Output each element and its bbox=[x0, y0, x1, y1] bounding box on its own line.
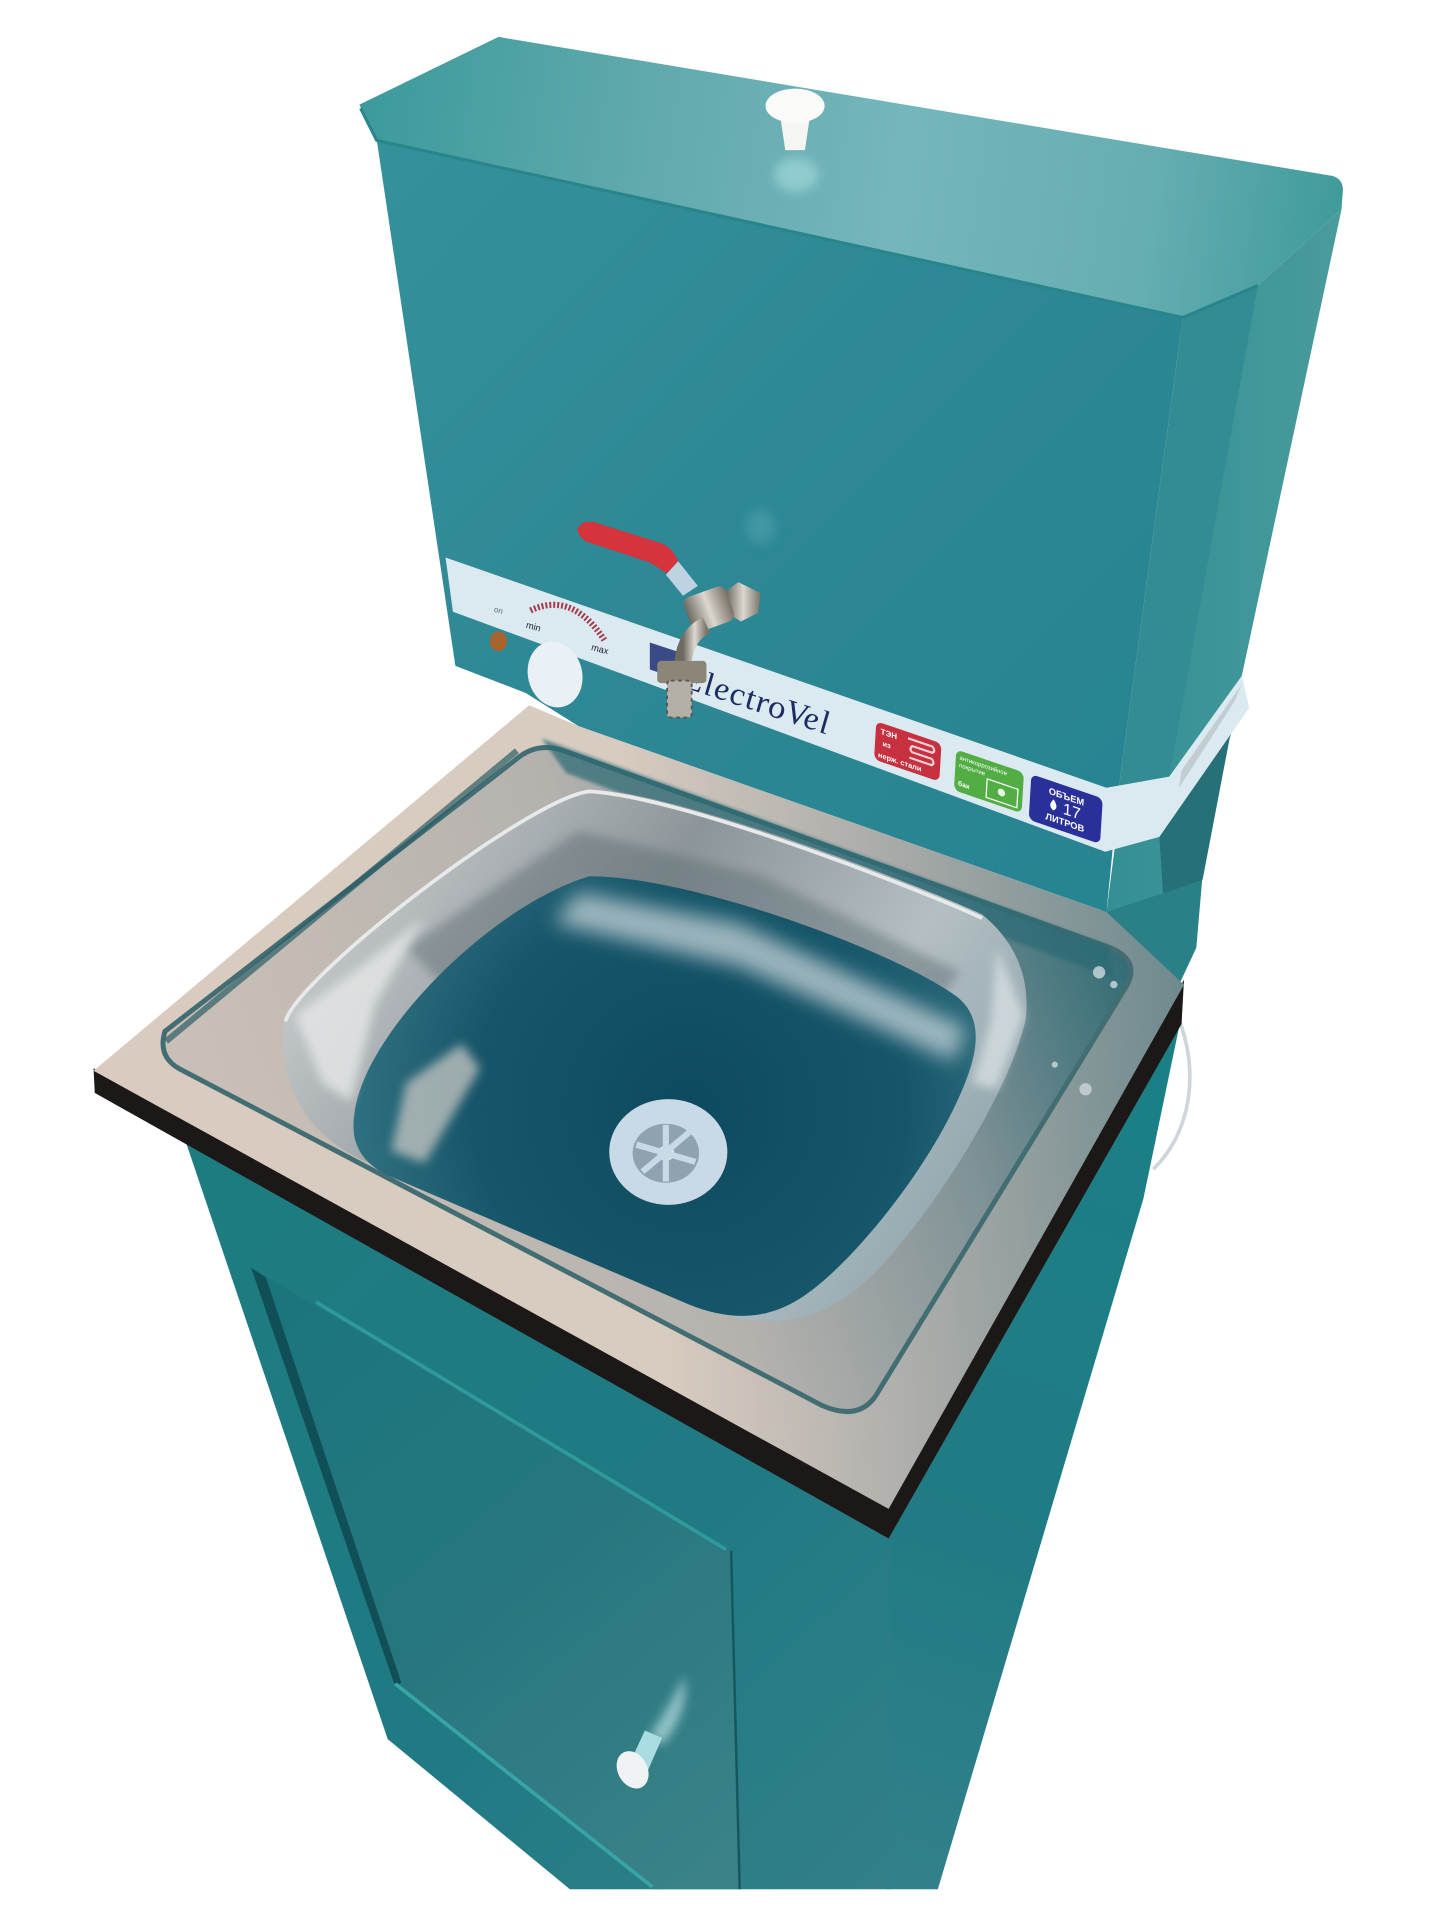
faucet inlet bbox=[726, 582, 761, 622]
tank lower side shade bbox=[1159, 713, 1238, 894]
hose barb bbox=[667, 681, 692, 718]
basin rim highlight bbox=[286, 791, 982, 1022]
door bottom highlight bbox=[395, 1684, 652, 1887]
sink top plate bbox=[94, 705, 1184, 1538]
lid reflection bbox=[774, 158, 818, 192]
band label: max: max bbox=[590, 642, 610, 656]
faucet bbox=[577, 522, 761, 718]
basin walls bbox=[283, 789, 1027, 1321]
indicator lamp bbox=[490, 631, 507, 651]
cabinet door bbox=[251, 1268, 740, 1889]
thermostat knob bbox=[521, 636, 589, 713]
basin floor bbox=[353, 876, 976, 1316]
brand name: ElectroVel bbox=[680, 658, 832, 743]
basin back wall shade bbox=[406, 831, 960, 1003]
water tank bbox=[359, 37, 1343, 912]
band label: on: on bbox=[493, 605, 504, 616]
basin left warm reflection bbox=[391, 1044, 480, 1163]
green badge: coating: покрытие bbox=[959, 762, 986, 778]
red badge: heater bbox=[874, 721, 942, 782]
red badge: heater: ТЭН bbox=[880, 727, 897, 741]
red badge: heater: нерж. стали bbox=[878, 750, 922, 774]
back flange reflection bbox=[542, 738, 1114, 978]
faucet spout bbox=[683, 625, 706, 662]
door top highlight bbox=[316, 1302, 726, 1550]
brand logo mark bbox=[650, 642, 679, 679]
plate black edge bbox=[94, 980, 1184, 1538]
plate rim channel bbox=[163, 747, 1131, 1412]
blue badge: volume: ОБЪЕМ bbox=[1048, 786, 1084, 809]
faucet lever bbox=[666, 561, 698, 596]
cabinet side panel bbox=[884, 1015, 1182, 1889]
lid front edge bbox=[361, 108, 1258, 318]
red badge: heater: из bbox=[882, 739, 891, 751]
cabinet front panel bbox=[185, 1138, 891, 1889]
faucet handle bbox=[577, 522, 678, 574]
basin left glare bbox=[295, 917, 425, 1102]
door knob bbox=[610, 1676, 685, 1794]
left flange reflection bbox=[166, 751, 517, 1041]
tank chamfer bbox=[1119, 286, 1258, 788]
tank lid bbox=[359, 37, 1343, 318]
drain bbox=[609, 1099, 727, 1205]
label band bbox=[446, 558, 1249, 852]
green badge: coating: бак bbox=[958, 779, 970, 791]
band dial scale bbox=[530, 605, 604, 640]
basin right glare bbox=[972, 948, 1024, 1089]
faucet nut bbox=[657, 661, 706, 683]
green badge: coating: антикоррозийное bbox=[959, 755, 1008, 778]
green badge: coating bbox=[954, 750, 1024, 813]
plate surface bbox=[94, 705, 1184, 1509]
blue badge: volume: ЛИТРОВ bbox=[1045, 811, 1085, 835]
door left gap bbox=[251, 1268, 401, 1686]
cabinet base bbox=[185, 1015, 1182, 1889]
tank front bbox=[377, 139, 1183, 912]
blue badge: volume: 17 bbox=[1062, 800, 1081, 824]
faucet valve body bbox=[682, 584, 736, 634]
basin floor highlight bbox=[554, 892, 966, 1061]
door right edge bbox=[731, 1551, 740, 1889]
blue badge: volume bbox=[1029, 774, 1103, 844]
water drops bbox=[1052, 966, 1118, 1095]
lid cap bbox=[766, 89, 825, 150]
backsplash behind tank bbox=[1102, 876, 1202, 985]
band label: min: min bbox=[525, 620, 542, 633]
tank soft spot bbox=[746, 510, 775, 544]
side label fine print bbox=[1179, 684, 1242, 788]
tank side bbox=[1106, 209, 1342, 912]
power cord bbox=[1153, 1017, 1190, 1169]
